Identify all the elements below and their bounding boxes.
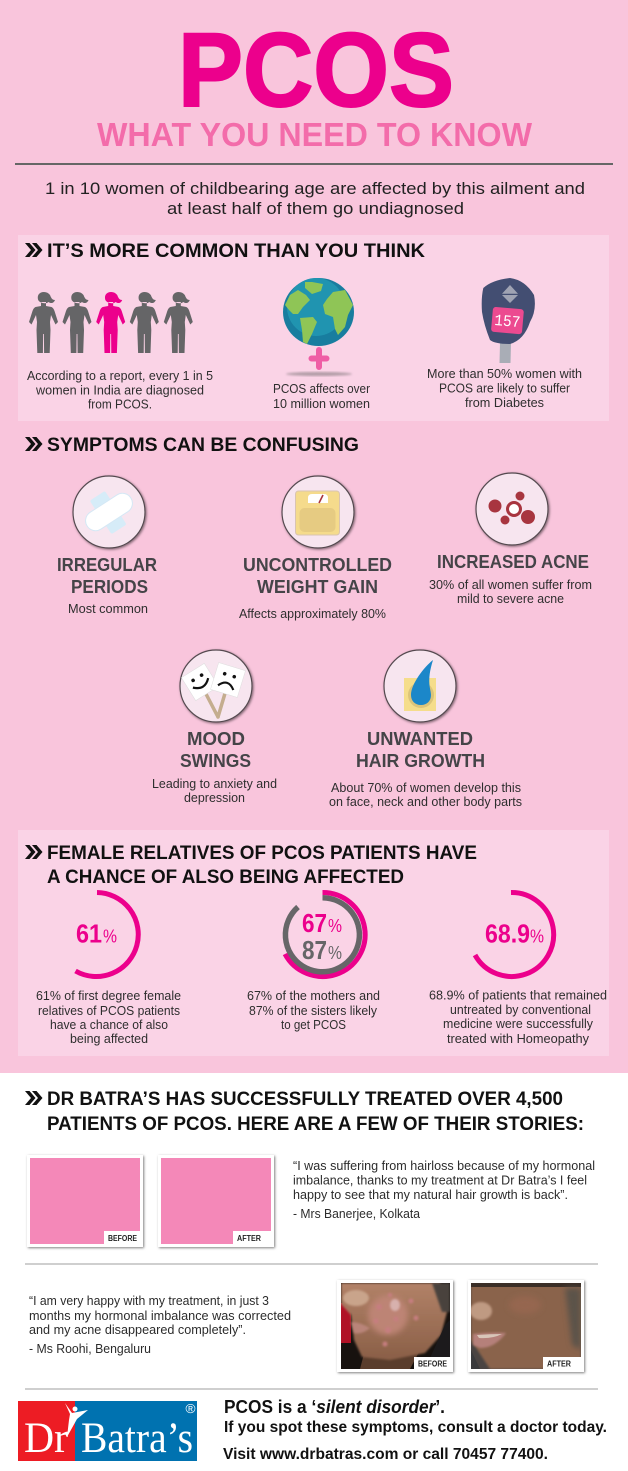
quote: Ms Roohi: - Ms Roohi, Bengaluru — [29, 1341, 151, 1356]
photo: acne before: BEFORE — [418, 1360, 448, 1368]
symptom: mood swings: SWINGS — [180, 750, 251, 771]
chart: 68.9 percent ring — [475, 892, 554, 976]
text: diabetes — [427, 366, 582, 410]
text: first degree relatives — [36, 988, 181, 1046]
pink background — [0, 0, 628, 1073]
chart: 61 percent ring: 61 — [76, 918, 102, 948]
call to action: Visit www.drbatras.com or call 70457 77400. — [223, 1446, 548, 1463]
text: 10 million women: 10 million women — [273, 396, 370, 411]
chart: 67 and 87 percent double ring: 87 — [302, 935, 327, 965]
intro text: at least half of them go undiagnosed — [167, 200, 464, 218]
symptom: irregular periods: PERIODS — [71, 576, 148, 597]
symptom: increased acne: INCREASED ACNE — [437, 551, 589, 572]
photo: acne after — [468, 1280, 584, 1372]
heading: patient stories: DR BATRA’S HAS SUCCESSFULLY TREATED OVER 4,500 — [47, 1088, 563, 1110]
quote: Mrs Banerjee — [293, 1158, 595, 1221]
chart: 61 percent ring: % — [103, 926, 117, 946]
quote: Ms Roohi — [29, 1293, 291, 1356]
logo: Dr Batra's — [18, 1401, 197, 1462]
text: first degree relatives: being affected — [70, 1031, 148, 1046]
symptom: increased acne — [429, 473, 592, 606]
intro text: 1 in 10 women of childbearing age are affected by this ailment and — [45, 180, 585, 198]
text: 1 in 5 women: women in India are diagnosed — [35, 382, 204, 398]
chart: 67 and 87 percent double ring: 67 — [302, 908, 327, 938]
symptom: increased acne: 30% of all women suffer from — [429, 577, 592, 592]
subtitle: WHAT YOU NEED TO KNOW — [97, 116, 533, 153]
heading: relatives: FEMALE RELATIVES OF PCOS PATIENTS HAVE — [47, 842, 477, 864]
heading: common: IT’S MORE COMMON THAN YOU THINK — [47, 240, 425, 262]
quote: Mrs Banerjee: “I was suffering from hairloss because of my hormonal — [293, 1158, 595, 1173]
chart: 68.9 percent ring: % — [530, 926, 544, 946]
text: homeopathy: untreated by conventional — [450, 1002, 591, 1017]
icon: globe with female symbol — [283, 278, 354, 376]
text: diabetes: PCOS are likely to suffer — [439, 380, 571, 396]
symptom: irregular periods: Most common — [68, 601, 148, 616]
title: PCOS — [178, 12, 454, 129]
text: diabetes: More than 50% women with — [427, 366, 582, 381]
symptom: unwanted hair growth: HAIR GROWTH — [356, 750, 485, 771]
intro text — [45, 180, 585, 218]
heading: relatives — [25, 842, 477, 888]
symptom: mood swings: Leading to anxiety and — [152, 776, 277, 791]
heading: symptoms: SYMPTOMS CAN BE CONFUSING — [47, 434, 359, 456]
logo: Dr Batra's: Batra’s — [81, 1415, 193, 1462]
call to action: If you spot these symptoms, consult a doctor today. — [224, 1419, 607, 1436]
symptom: weight gain — [239, 476, 392, 621]
quote: Mrs Banerjee: - Mrs Banerjee, Kolkata — [293, 1206, 421, 1221]
panel: female relatives — [18, 830, 609, 1056]
quote: Mrs Banerjee: imbalance, thanks to my treatment at Dr Batra’s I feel — [293, 1172, 587, 1188]
call to action — [223, 1397, 607, 1463]
text: first degree relatives: relatives of PCOS patients — [38, 1003, 180, 1018]
symptom: unwanted hair growth: on face, neck and other body parts — [329, 794, 522, 809]
photo: hair after — [158, 1155, 274, 1247]
quote: Ms Roohi: months my hormonal imbalance was corrected — [29, 1308, 291, 1323]
icon: acne spots — [476, 473, 548, 545]
panel: more common than you think — [18, 235, 609, 421]
symptom: increased acne: mild to severe acne — [457, 591, 564, 606]
quote: Ms Roohi: and my acne disappeared completely”. — [29, 1322, 246, 1337]
symptom: irregular periods: IRREGULAR — [57, 554, 157, 575]
photo: acne before — [337, 1280, 453, 1372]
icon: five women, one highlighted — [29, 292, 193, 353]
symptom: mood swings: MOOD — [187, 728, 245, 749]
icon: glucose meter reading 157: 157 — [494, 312, 521, 332]
text: diabetes: from Diabetes — [465, 395, 544, 410]
text: first degree relatives: 61% of first degree female — [36, 988, 181, 1003]
heading: relatives: A CHANCE OF ALSO BEING AFFECTED — [47, 866, 404, 888]
photo: acne after: AFTER — [547, 1360, 571, 1368]
heading: patient stories: PATIENTS OF PCOS. HERE ARE A FEW OF THEIR STORIES: — [47, 1113, 584, 1135]
icon: hair follicle — [384, 650, 456, 722]
text: mothers and sisters — [247, 988, 380, 1032]
text: mothers and sisters: 87% of the sisters likely — [249, 1003, 378, 1018]
photo: hair before: BEFORE — [108, 1234, 138, 1243]
chart: 67 and 87 percent double ring: % — [328, 943, 342, 963]
quote: Ms Roohi: “I am very happy with my treatment, in just 3 — [29, 1293, 269, 1308]
chart: 67 and 87 percent double ring — [285, 892, 365, 976]
text: homeopathy: medicine were successfully — [443, 1016, 594, 1031]
icon: bathroom scale — [282, 476, 354, 548]
photo: hair before — [27, 1155, 143, 1247]
chart: 61 percent ring — [76, 892, 138, 976]
logo: Dr Batra's: ® — [186, 1401, 196, 1416]
text: homeopathy — [429, 988, 607, 1046]
icon: glucose meter reading 157 — [482, 278, 535, 363]
text: 10 million women — [273, 381, 371, 411]
photo: hair after: AFTER — [237, 1234, 261, 1243]
heading: patient stories — [25, 1088, 584, 1135]
symptom: unwanted hair growth: About 70% of women develop this — [331, 780, 521, 795]
text: mothers and sisters: to get PCOS — [281, 1017, 346, 1032]
symptom: weight gain: UNCONTROLLED — [243, 554, 392, 575]
text: 10 million women: PCOS affects over — [273, 381, 371, 396]
symptom: weight gain: WEIGHT GAIN — [257, 576, 378, 597]
text: first degree relatives: have a chance of also — [50, 1017, 168, 1032]
text: 1 in 5 women: According to a report, every 1 in 5 — [27, 368, 213, 383]
icon: happy and sad face signs — [180, 650, 252, 722]
chart: 67 and 87 percent double ring: % — [328, 916, 342, 936]
text: 1 in 5 women: from PCOS. — [88, 396, 152, 412]
symptom: mood swings — [152, 650, 277, 805]
quote: Mrs Banerjee: happy to see that my natural hair growth is back”. — [293, 1187, 568, 1202]
symptom: irregular periods — [57, 476, 157, 616]
logo: Dr Batra's: Dr — [24, 1415, 68, 1462]
text: mothers and sisters: 67% of the mothers and — [247, 988, 380, 1003]
text: homeopathy: 68.9% of patients that remained — [429, 988, 607, 1002]
icon: sanitary pad — [73, 476, 145, 548]
chart: 68.9 percent ring: 68.9 — [485, 918, 530, 948]
symptom: mood swings: depression — [184, 790, 245, 805]
symptom: unwanted hair growth: UNWANTED — [367, 728, 473, 749]
call to action: PCOS is a ‘silent disorder’. — [224, 1397, 445, 1417]
symptom: weight gain: Affects approximately 80% — [239, 606, 386, 621]
symptom: unwanted hair growth — [329, 650, 522, 809]
text: homeopathy: treated with Homeopathy — [447, 1031, 590, 1046]
text: 1 in 5 women — [27, 368, 213, 412]
